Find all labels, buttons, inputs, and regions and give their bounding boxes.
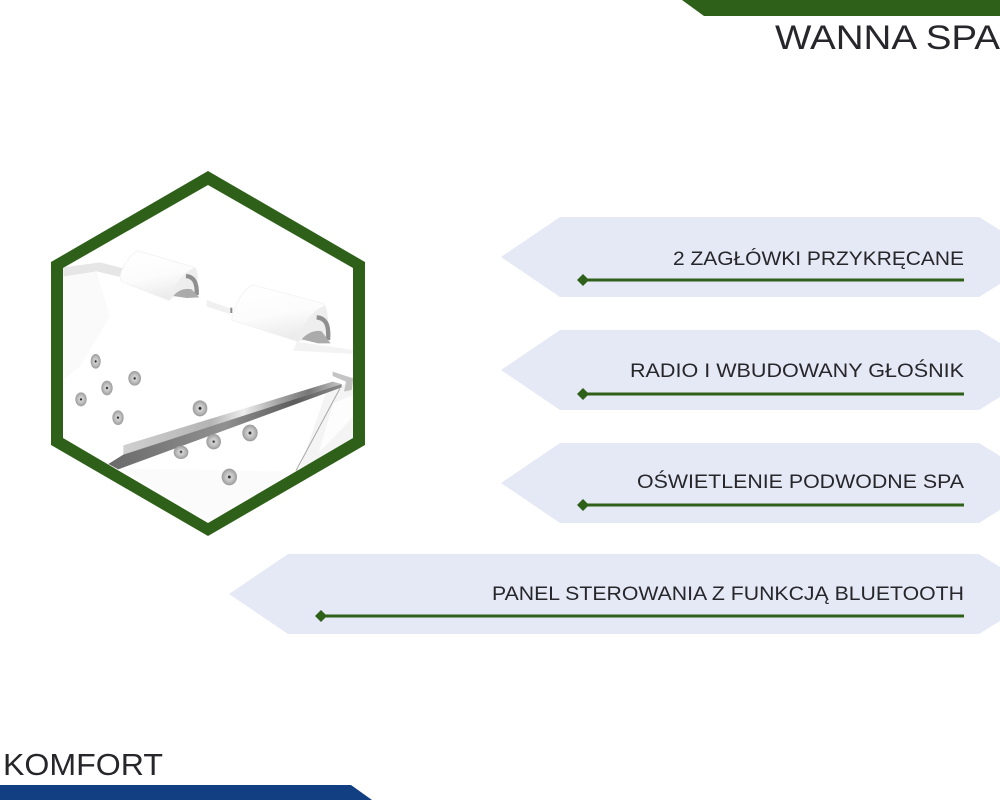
feature banner 3 <box>501 443 1000 523</box>
chrome bar <box>123 382 342 455</box>
pointer line 4 <box>315 610 964 622</box>
hexagon frame <box>51 171 365 536</box>
feature banner 4 <box>229 554 1000 634</box>
feature banner 2 <box>501 330 1000 410</box>
title: WANNA SPA: WANNA SPA <box>775 19 1000 57</box>
pointer line 3 <box>577 499 964 511</box>
bottom blue banner <box>0 785 372 800</box>
hexagon photo: spa bathtub <box>51 170 365 536</box>
label 4: PANEL STEROWANIA Z FUNKCJĄ BLUETOOTH <box>492 583 964 605</box>
pointer line 2 <box>577 388 964 400</box>
label 1: 2 ZAGŁÓWKI PRZYKRĘCANE <box>673 247 964 270</box>
feature banner 1 <box>501 217 1000 297</box>
photo of bathtub with headrests and jets <box>64 250 353 486</box>
pointer line 1 <box>577 274 964 286</box>
heading: KOMFORT: KOMFORT <box>3 747 163 782</box>
top green banner <box>682 0 1000 16</box>
label 3: OŚWIETLENIE PODWODNE SPA <box>637 469 964 493</box>
label 2: RADIO I WBUDOWANY GŁOŚNIK <box>630 358 964 382</box>
headrest 2 <box>232 285 325 342</box>
headrest 1 <box>120 251 195 301</box>
water jets <box>75 354 258 485</box>
